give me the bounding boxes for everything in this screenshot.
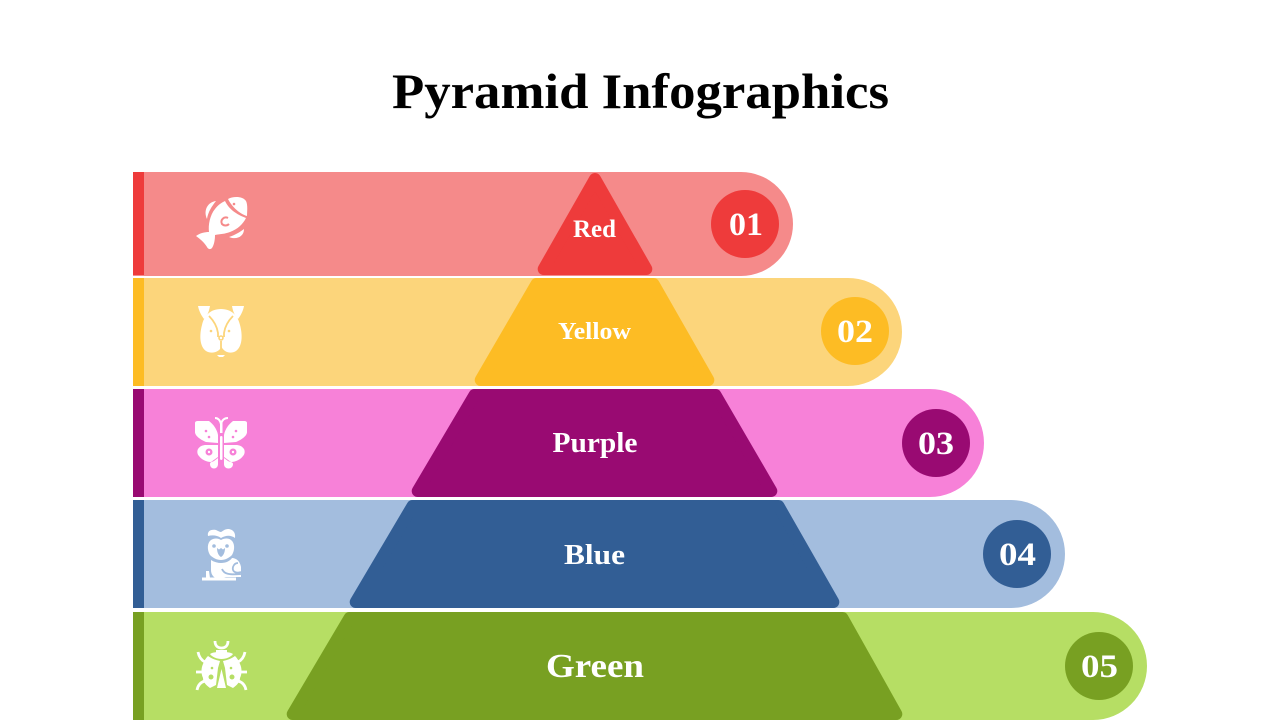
icon: butterfly [195,418,247,468]
yellow pyramid segment [481,284,708,380]
purple pyramid segment [418,395,771,491]
green bar [133,612,1147,720]
blue number badge: 04 [999,537,1036,573]
icon: hamster [198,306,244,357]
yellow bar [133,278,902,386]
green number badge: 05 [1081,649,1118,685]
icon: owl [202,529,241,580]
blue bar [133,500,1065,608]
purple number badge [902,409,970,477]
yellow accent [133,278,144,386]
panel: red tier [133,172,793,276]
purple label: Purple [552,428,638,459]
icon: fish [196,197,247,249]
panel: green tier [133,612,1147,720]
green label: Green [546,648,644,685]
panel: purple tier [133,389,984,497]
blue number badge [983,520,1051,588]
red pyramid segment [544,179,646,269]
green number badge [1065,632,1133,700]
icon: ladybug [196,641,247,690]
red number badge: 01 [729,207,763,243]
yellow number badge: 02 [837,314,873,350]
panel: yellow tier [133,278,902,386]
panel: blue tier [133,500,1065,608]
blue accent [133,500,144,608]
green pyramid segment [293,618,896,714]
title: Pyramid Infographics [392,63,889,119]
red accent [133,172,144,275]
purple number badge: 03 [918,426,954,462]
yellow label: Yellow [558,319,632,345]
red bar [133,172,793,276]
green accent [133,612,144,720]
yellow number badge [821,297,889,365]
blue pyramid segment [356,506,833,602]
blue label: Blue [564,539,625,571]
purple accent [133,389,144,497]
red number badge [711,190,779,258]
red label: Red [573,216,616,243]
purple bar [133,389,984,497]
